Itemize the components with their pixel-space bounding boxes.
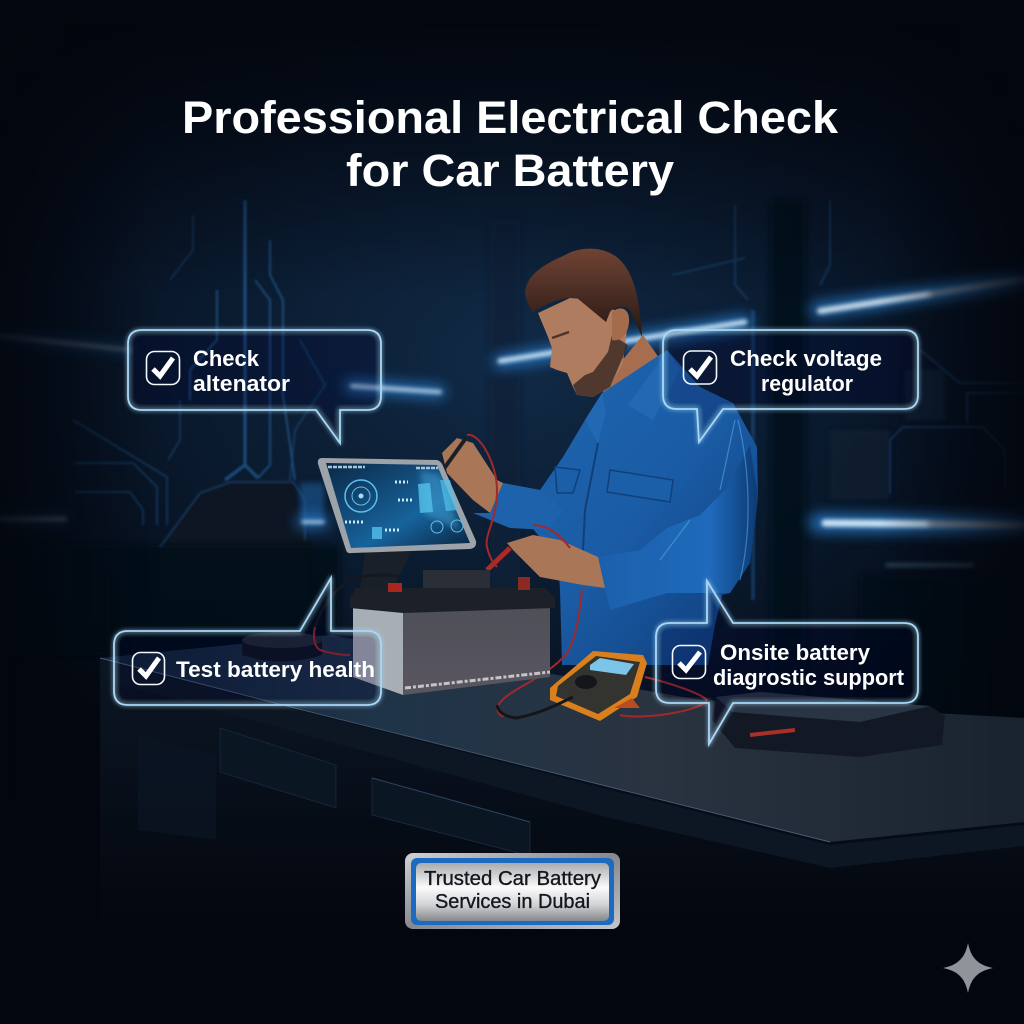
check icon [672,646,706,678]
circuit lines: right [672,200,1024,600]
chest pockets [555,467,673,502]
eye brow [552,332,569,338]
small round device on bench [242,632,322,662]
icon: sparkle watermark [943,943,993,993]
callout text: altenator [193,371,290,396]
callout text: Check [193,346,260,371]
callout: test battery health [114,578,381,705]
face [538,298,628,397]
callout text: diagrostic support [713,665,905,690]
car battery [315,570,555,695]
bench front edge highlight [100,658,830,842]
lower hand [507,535,605,588]
check icon [146,352,180,384]
undershirt [600,398,627,440]
red probe in lower hand [487,548,510,570]
title: Professional Electrical Check [182,92,839,143]
battery lid [350,588,555,613]
raised forearm sleeve [473,483,563,530]
test leads [314,435,707,717]
callout text: Test battery health [176,657,375,682]
bench front and drawers [0,658,1024,1024]
neck [602,335,662,412]
technician [436,249,758,665]
title [182,92,839,196]
callout text: Onsite battery [720,640,871,665]
callout text: Check voltage [730,346,882,371]
battery side face [353,607,403,695]
multimeter [550,651,647,721]
ear [612,308,629,340]
tablet with diagnostics [318,458,476,590]
check icon [132,652,164,684]
title: for Car Battery [346,145,674,196]
callout text [713,640,905,690]
black tester box on bench [712,692,945,757]
callout text: regulator [761,371,853,396]
glowing ceiling light strips [0,279,1024,565]
workbench [0,635,1024,1024]
jacket torso [490,350,758,665]
check icon [684,351,716,384]
callout text [193,346,290,396]
black probe lead [497,697,573,718]
raised hand holding probe [436,438,503,513]
callout: onsite battery diagnostic support [656,581,918,744]
beard [573,335,628,397]
badge: trusted car battery services [405,853,620,929]
callout text [730,346,882,396]
hair [525,249,642,337]
callout: check voltage regulator [663,330,918,442]
jacket placket [582,443,598,570]
sleeve fold lines [660,420,748,580]
badge: trusted car battery services: Trusted Car Battery [424,868,601,890]
circuit lines: left [73,200,325,547]
collar [585,350,680,443]
bench top surface [100,635,1024,842]
callout: check alternator [128,330,381,443]
battery front face [403,607,550,695]
badge: trusted car battery services: Services in Dubai [435,891,590,913]
lower arm sleeve [598,445,758,610]
